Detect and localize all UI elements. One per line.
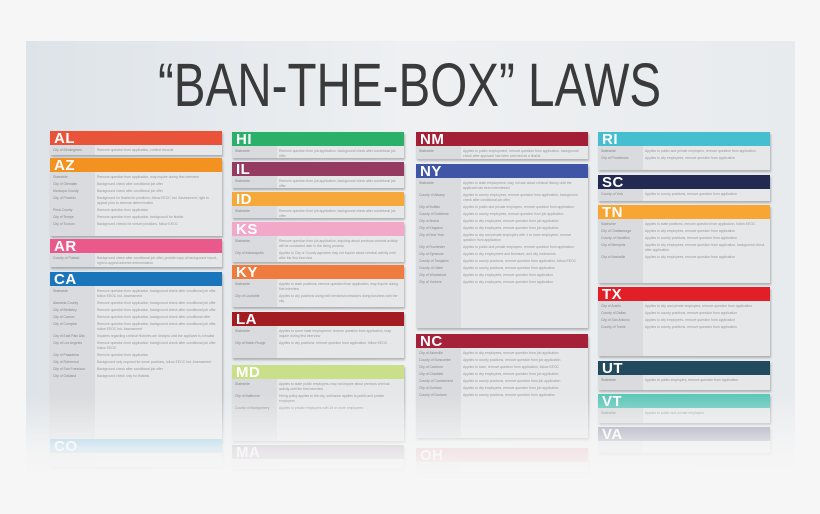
panel: TX: City of San Antonio [601,318,630,322]
panel: NM: Applies to public employment, remove question from application, background check after applicant has been selected as a finalist [463,149,579,158]
panel: NC: Applies to town, remove question from application, follow EEOC [463,365,559,369]
panel: CA: City of Richmond [53,360,79,364]
panel: AZ: City of Tucson [53,222,74,226]
panel: LA: City of Baton Rouge [235,341,265,345]
panel: TN: Applies to county positions, remove question from application [645,236,737,240]
panel: KS: Statewide [235,239,250,243]
panel: IL [232,162,404,188]
panel: NC: Applies to city employees, remove question from job application [463,372,559,376]
panel: MD: Applies to state public employers, may not inquire about previous criminal activity until the first interview [279,382,389,391]
panel: VA [598,427,770,453]
panel: AZ: Statewide [53,175,68,179]
panel: NY: County of Ulster [419,266,443,270]
panel: LA: Applies to city positions, remove question from application, follow EEOC [279,341,387,345]
panel: RI: Applies to public and private employers, remove question from application [645,149,756,153]
panel: CA: City of Carson [53,315,74,319]
panel: AZ: City of Tempe [53,215,74,219]
panel: NY: County of Albany [419,193,445,197]
panel: TN: Applies to city employees, remove question from application [645,255,735,259]
panel: NY: City of Rochester [419,245,445,249]
panel: TN: TN [602,204,623,221]
panel: ID: Statewide [235,209,250,213]
panel: NC: City of Charlotte [419,372,443,376]
panel: NY: Applies to city employment and licensure, and city contractors [463,252,556,256]
panel: AZ: Background for finalist for positions, follow EEOC Ind. Assessment, right to appeal prior to adverse determination [97,196,209,205]
panel: AZ: Background check after conditional job offer [97,189,163,193]
panel: CA: City of San Francisco [53,367,85,371]
panel: UT: UT [602,360,623,377]
panel: IL: Statewide [235,179,250,183]
panel: KY: Applies to state positions, remove question from application, may inquire during first interview [279,282,398,291]
panel: CA [50,272,222,441]
panel: AL: City of Birmingham [53,148,82,152]
panel: KS: City of Indianapolis [235,251,264,255]
panel: CA: City of Oakland [53,374,76,378]
panel: NY [416,164,588,328]
panel: NY: Applies to county positions, remove question from application [463,266,555,270]
panel: VA: VA [602,426,623,443]
panel: KY: City of Louisville [235,294,260,298]
panel: MA: MA [236,444,260,461]
panel: LA: Statewide [235,329,250,333]
panel: NY: Applies to county employees, remove question from application, background check after conditional job offer [463,193,578,202]
panel: NC: County of Cumberland [419,379,453,383]
panel: NC: Applies to city employees, remove question from job application [463,351,559,355]
panel: MD: Hiring policy applies to the city, ordinance applies to public and private employers [279,394,384,403]
panel: NY: Applies to city and private employers with 4 or more employees, remove question from application [463,233,571,242]
panel: AL: Remove question from application, context records [97,148,173,152]
panel: UT: Applies to public employers, remove question from application [645,378,738,382]
panel: RI: RI [602,131,618,148]
panel: NC: NC [420,333,443,350]
panel: NY: Applies to city employees, remove question from application [463,273,553,277]
panel: NY: City of Buffalo [419,205,440,209]
panel: NY: City of New York [419,233,444,237]
panel: TN: County of Hamilton [601,236,630,240]
panel: NY: City of Kingston [419,226,443,230]
panel: MD [232,365,404,441]
panel: NY: County of Dutchess [419,212,449,216]
panel: VT: Applies to public and private employers [645,411,704,415]
panel: TN: City of Memphis [601,243,625,247]
panel: CA: City of East Palo Alto [53,334,85,338]
panel: TN: City of Chattanooga [601,229,631,233]
panel: MD: Statewide [235,382,250,386]
panel: OH [416,448,588,472]
panel: TN [598,205,770,283]
panel: MD: MD [236,364,260,381]
panel: TN: Applies to city employees, remove question from application, background check after application [645,243,764,252]
panel: CA: Remove question from application, background check after conditional job offer [97,301,216,305]
panel: CA: Remove question from application, background check after conditional job offer [97,308,216,312]
panel: HI [232,132,404,158]
panel: NY: Applies to city employees, remove question from application [463,280,553,284]
panel: AZ: Background checks for certain positions, follow EEOC [97,222,178,226]
panel: NC: County of Buncombe [419,358,451,362]
title: “BAN-THE-BOX” LAWS [158,51,662,119]
panel: RI: City of Providence [601,156,629,160]
panel: AZ [50,158,222,236]
panel: AZ: Remove question from application, background for finalist [97,215,183,219]
panel: NY: City of Syracuse [419,252,444,256]
panel: TX: County of Dallas [601,311,626,315]
panel: NY: Applies to state employment, may not ask about criminal history until the applicant has been interviewed [463,181,572,190]
panel: NC: Applies to city employees, remove question from job application [463,386,559,390]
panel: AL: AL [54,130,75,147]
panel: TX: Applies to county positions, remove question from application [645,311,737,315]
panel: KY: Statewide [235,282,250,286]
panel: CA: Background only required for some positions, follow EEOC Ind. Assessment [97,360,211,364]
panel: CA: Alameda County [53,301,78,305]
panel: AZ: Maricopa County [53,189,79,193]
panel: ID: ID [236,191,252,208]
panel: SC [598,175,770,201]
panel: CO: CO [54,438,78,455]
panel: VT: VT [602,393,622,410]
panel: MD: Applies to private employers with 15 or more employees [279,406,363,410]
panel: CA: Background check only for finalists [97,374,149,378]
panel: AZ: City of Glendale [53,182,77,186]
panel: SC: Applies to county positions, remove question from application [645,192,737,196]
panel: CA: Remove question from application, background check after conditional job offer, follow EEOC Ind. Assessment [97,322,216,331]
panel: CO [50,439,222,467]
panel: NC: City of Asheville [419,351,443,355]
panel: HI: Remove question from job application, background check after conditional job offer [279,149,395,158]
panel: SC: County of York [601,192,623,196]
panel: TX: County of Travis [601,325,626,329]
panel: TN: City of Nashville [601,255,625,259]
panel: LA: Applies to some state employment, remove question from application, may inquire during first interview [279,329,391,338]
panel: LA [232,312,404,358]
panel: NY: Statewide [419,181,434,185]
panel: NY: Applies to city employees, remove question from job application [463,219,559,223]
panel: VT: Statewide [601,411,616,415]
panel: AL [50,131,222,155]
panel: NY: Applies to public and private employers, remove question from application [463,205,574,209]
panel: TX: City of Austin [601,304,621,308]
panel: AR: Background check after conditional job offer, provide copy of background report, right to appeal adverse determination [97,256,217,265]
panel: ID [232,192,404,218]
panel: NY: NY [420,163,442,180]
panel: UT: Statewide [601,378,616,382]
panel: NY: City of Yonkers [419,280,442,284]
panel: ID: Remove question from job application, background check after conditional job offer [279,209,395,218]
panel: IL: IL [236,161,250,178]
panel: TX: Applies to city and private employers, remove question from application [645,304,752,308]
panel: KS [232,222,404,262]
panel: AZ: Remove question from application [97,208,148,212]
panel: KY: KY [236,264,258,281]
panel: TN: Statewide [601,222,616,226]
panel: KS: Remove question from job application, inquiring about previous criminal activity will be conducted later in the hiring process [279,239,398,248]
panel: CA: Inquiries regarding criminal histories are delayed until the applicant is a finalist [97,334,214,338]
panel: HI: Statewide [235,149,250,153]
panel: TX: Applies to county positions, remove question from application [645,325,737,329]
panel: AZ: Background check after conditional job offer [97,182,163,186]
panel: IL: Remove question from job application, background check after conditional job offer [279,179,395,188]
panel: NY: City of Woodstock [419,273,446,277]
panel: KS: Applies to City or County agencies may not inquire about criminal activity until after the first interview [279,251,395,260]
panel: MD: City of Baltimore [235,394,260,398]
panel: NC: Applies to county positions, remove question from application [463,393,555,397]
panel: RI [598,132,770,170]
panel: LA: LA [236,311,257,328]
panel: NY: Applies to public and private employers, remove question from application [463,245,574,249]
panel: HI: HI [236,131,252,148]
panel: OH: OH [420,447,444,464]
panel: NM: Statewide [419,149,434,153]
panel: CA: Remove question from application, background check after conditional job offer, follow EEOC [97,341,216,350]
panel: RI: Applies to city employees, remove question from application [645,156,735,160]
panel: CA: Statewide [53,289,68,293]
panel: AZ: AZ [54,157,75,174]
panel: NC: Applies to county positions, remove question from job application [463,379,560,383]
panel: CA: Remove question from application [97,353,148,357]
panel: AZ: Pima County [53,208,72,212]
panel: NM [416,132,588,159]
panel: TX: TX [602,286,622,303]
panel: CA: Remove question from application, background check after conditional offer [97,315,210,319]
panel: VT [598,394,770,423]
panel: CA: City of Berkeley [53,308,77,312]
panel: MA [232,445,404,469]
panel: TN: Applies to city employees, remove question from application [645,229,735,233]
panel: AR: AR [54,238,77,255]
panel: CA: CA [54,271,77,288]
panel: AZ: Remove question from application, may inquire during first interview [97,175,199,179]
panel: NC [416,334,588,438]
panel: TX [598,287,770,356]
panel: SC: SC [602,174,624,191]
panel: TX: Applies to city employees, remove question from application [645,318,735,322]
panel: KY: Applies to city positions along with vendors/contractors doing business with the city [279,294,397,303]
panel: CA: City of Compton [53,322,77,326]
panel: NY: Applies to county positions, remove question from application, follow EEOC [463,259,576,263]
panel: CA: Background check after conditional job offer [97,367,163,371]
panel: NC: City of Durham [419,386,442,390]
panel: AZ: City of Phoenix [53,196,76,200]
panel: CA: City of Los Angeles [53,341,82,345]
panel: TN: Applies to state positions, remove question from application, follow EEOC [645,222,755,226]
panel: NM: NM [420,131,444,148]
panel: NY: Applies to county employees, remove question from job application [463,212,563,216]
panel: AR [50,239,222,267]
panel: KY [232,265,404,307]
panel: UT [598,361,770,390]
panel: NC: Applies to county positions, remove question from job application [463,358,560,362]
panel: CA: City of Pasadena [53,353,79,357]
panel: NY: City of Ithaca [419,219,439,223]
panel: NC: County of Durham [419,393,447,397]
panel: CA: Remove question from application, background check after conditional job offer, follow EEOC Ind. Assessment [97,289,216,298]
panel: MD: County of Montgomery [235,406,269,410]
panel: NC: City of Carrboro [419,365,443,369]
panel: RI: Statewide [601,149,616,153]
panel: NY: County of Tompkins [419,259,449,263]
panel: NY: Applies to city employees, remove question from job application [463,226,559,230]
panel: AR: County of Pulaski [53,256,79,260]
panel: KS: KS [236,221,258,238]
